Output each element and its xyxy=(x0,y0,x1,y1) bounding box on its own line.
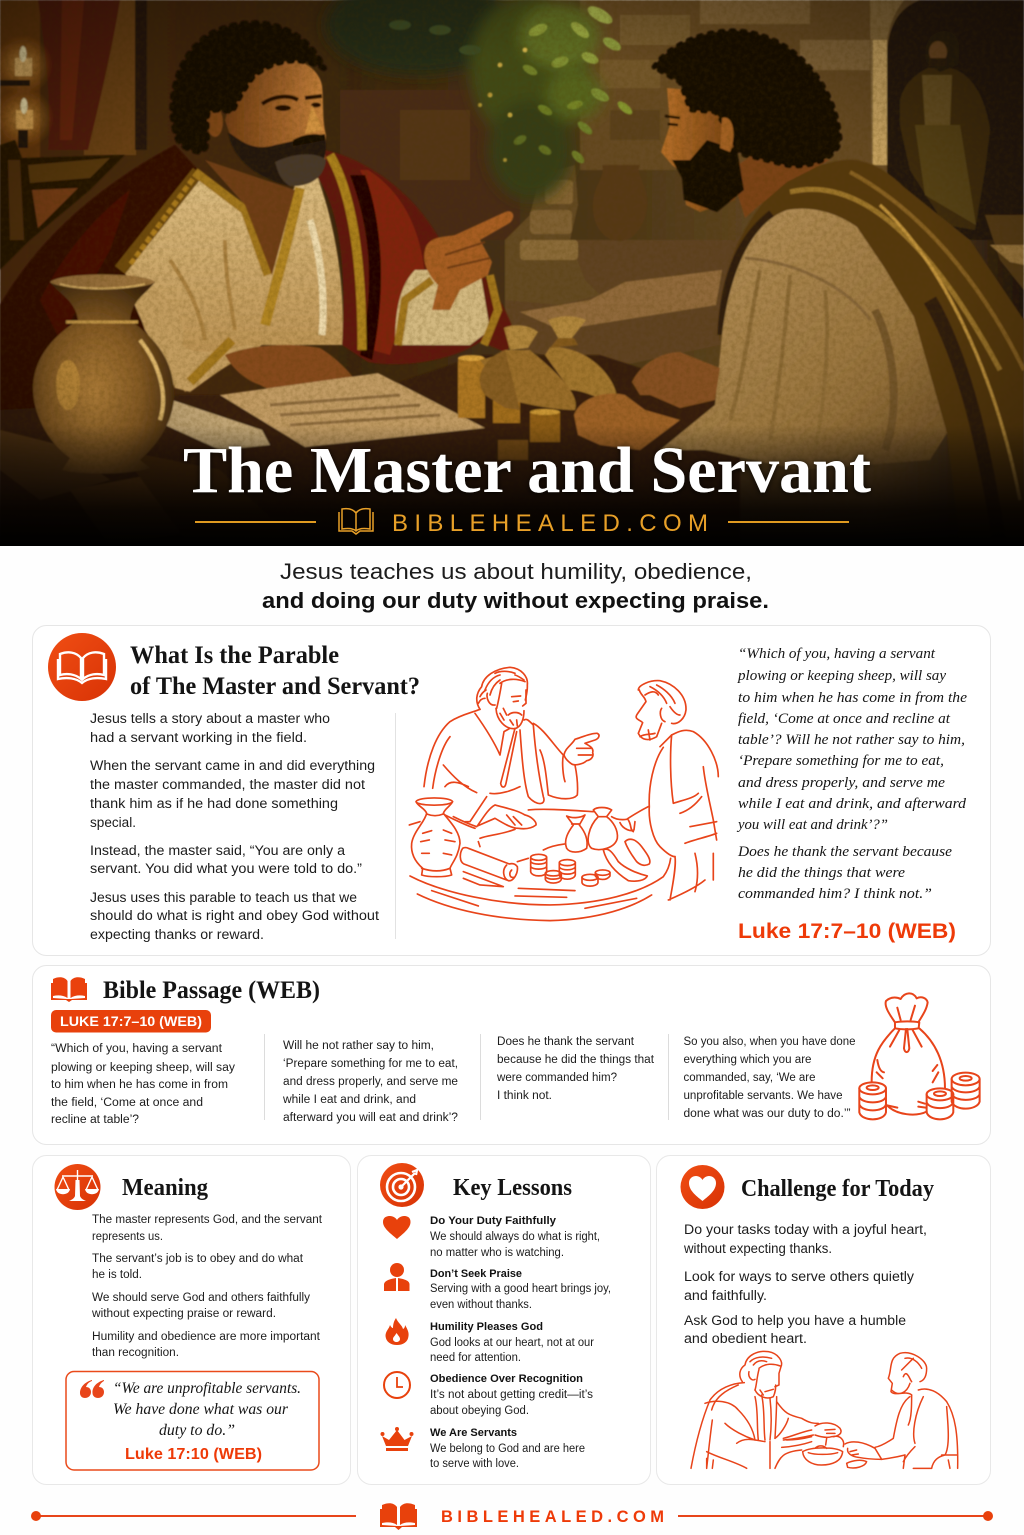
passage column 4: done what was our duty to do.’” xyxy=(684,1108,851,1120)
heading: Challenge for Today xyxy=(741,1176,934,1202)
metal jar xyxy=(33,274,174,474)
master: pointing hand xyxy=(395,270,490,345)
panel: challenge for today xyxy=(656,1156,990,1484)
scripture quote xyxy=(736,646,967,902)
passage column 2 xyxy=(282,1040,458,1124)
callout: key verse: We have done what was our xyxy=(113,1401,289,1418)
table xyxy=(0,355,740,546)
challenge text: Look for ways to serve others quietly xyxy=(684,1269,914,1284)
lesson: humility pleases god: Humility Pleases God xyxy=(430,1321,543,1333)
icon: scales xyxy=(54,1164,100,1210)
passage column 3: Does he thank the servant xyxy=(497,1036,635,1048)
icon: footer book xyxy=(380,1503,417,1530)
lesson: obedience over recognition xyxy=(384,1372,593,1417)
passage column 1: plowing or keeping sheep, will say xyxy=(51,1062,235,1074)
subtitle xyxy=(262,559,769,613)
meaning text: than recognition. xyxy=(92,1347,179,1359)
scripture quote: and dress properly, and serve me xyxy=(738,775,945,791)
meaning text: Humility and obedience are more important xyxy=(92,1331,321,1343)
icon: money bag and coins xyxy=(859,993,980,1119)
lesson: we are servants: We belong to God and are here xyxy=(430,1443,585,1455)
passage column 4: unprofitable servants. We have xyxy=(684,1090,842,1102)
lesson: obedience over recognition: Obedience Over Recognition xyxy=(430,1373,583,1385)
story text xyxy=(90,711,379,942)
stone pot xyxy=(594,165,639,239)
subtitle: and doing our duty without expecting praise. xyxy=(262,588,769,613)
story text: special. xyxy=(90,815,136,830)
icon: heart xyxy=(680,1165,724,1209)
servant: hands xyxy=(632,352,720,408)
story text: expecting thanks or reward. xyxy=(90,927,264,942)
lesson: humility pleases god: need for attention. xyxy=(430,1352,521,1364)
hero website brand xyxy=(195,509,849,537)
challenge text: and obedient heart. xyxy=(684,1331,807,1346)
hero banner: master and servant at the table xyxy=(0,0,1024,546)
icon: quote mark xyxy=(80,1380,104,1398)
meaning text: without expecting praise or reward. xyxy=(91,1308,276,1320)
passage column 1: recline at table’? xyxy=(51,1114,139,1126)
meaning text: We should serve God and others faithfully xyxy=(92,1292,310,1304)
callout: key verse xyxy=(66,1372,319,1470)
passage column 4 xyxy=(684,1036,856,1120)
master: cream tunic xyxy=(125,170,343,392)
passage column 2: Will he not rather say to him, xyxy=(283,1040,434,1052)
panel: what is the parable xyxy=(32,626,990,956)
lesson: do your duty faithfully: Do Your Duty Faithfully xyxy=(430,1215,557,1227)
challenge text: and faithfully. xyxy=(684,1288,767,1303)
master: red robe xyxy=(0,145,198,410)
story text: should do what is right and obey God without xyxy=(90,908,379,923)
meaning text: The master represents God, and the servant xyxy=(92,1214,323,1226)
passage column 3: I think not. xyxy=(497,1090,552,1102)
panel: key lessons xyxy=(358,1156,650,1484)
scripture quote: plowing or keeping sheep, will say xyxy=(737,668,946,684)
courtyard ground xyxy=(504,240,706,364)
lesson: we are servants: to serve with love. xyxy=(430,1458,519,1470)
subtitle: Jesus teaches us about humility, obedience, xyxy=(280,559,752,584)
servant: shawl xyxy=(720,159,1024,494)
passage column 2: and dress properly, and serve me xyxy=(283,1076,458,1088)
meaning text: he is told. xyxy=(92,1269,142,1281)
story text: Jesus tells a story about a master who xyxy=(90,711,330,726)
reference badge: LUKE 17:7–10 (WEB) xyxy=(60,1013,202,1029)
passage column 4: So you also, when you have done xyxy=(684,1036,856,1048)
passage column 1 xyxy=(51,1043,235,1126)
scripture quote: while I eat and drink, and afterward xyxy=(738,796,967,812)
story text: thank him as if he had done something xyxy=(90,796,338,811)
story text: the master commanded, the master did not xyxy=(90,777,365,792)
footer brand xyxy=(31,1503,993,1530)
painted texture xyxy=(0,0,1024,458)
callout: key verse: Luke 17:10 (WEB) xyxy=(125,1446,262,1463)
challenge text xyxy=(683,1222,927,1346)
parchment and scroll xyxy=(220,373,485,447)
callout: key verse: “We are unprofitable servants. xyxy=(113,1380,301,1397)
heading: of The Master and Servant? xyxy=(130,673,420,700)
heading: Bible Passage (WEB) xyxy=(103,977,320,1004)
story text: When the servant came in and did everything xyxy=(90,758,375,773)
scripture quote: he did the things that were xyxy=(738,865,905,881)
callout: key verse: duty to do.” xyxy=(159,1422,235,1439)
heading: Meaning xyxy=(122,1175,208,1201)
challenge text: without expecting thanks. xyxy=(683,1241,832,1256)
meaning text xyxy=(91,1214,323,1359)
heading xyxy=(130,642,420,700)
passage column 3: were commanded him? xyxy=(496,1072,617,1084)
story text: servant. You did what you were told to do.” xyxy=(90,861,362,876)
scripture quote: “Which of you, having a servant xyxy=(738,646,936,662)
passage column 4: everything which you are xyxy=(684,1054,812,1066)
illustration: master and servant at the table xyxy=(409,667,718,921)
passage column 2: ‘Prepare something for me to eat, xyxy=(283,1058,458,1070)
master: face, beard and hair xyxy=(225,58,326,175)
dark fade behind title xyxy=(0,425,1024,546)
passage column 4: commanded, say, ‘We are xyxy=(684,1072,816,1084)
scripture quote: to him when he has come in from the xyxy=(738,690,967,706)
story text: Jesus uses this parable to teach us that we xyxy=(90,890,357,905)
challenge text: Do your tasks today with a joyful heart, xyxy=(684,1222,927,1237)
lesson: do your duty faithfully: no matter who is watching. xyxy=(430,1247,564,1259)
icon: target xyxy=(380,1163,424,1207)
story text: had a servant working in the field. xyxy=(90,730,307,745)
scripture reference: Luke 17:7–10 (WEB) xyxy=(738,920,956,943)
story text: Instead, the master said, “You are only a xyxy=(90,843,346,858)
passage column 3: because he did the things that xyxy=(497,1054,655,1066)
passage column 2: afterward you will eat and drink’? xyxy=(283,1112,458,1124)
challenge text: Ask God to help you have a humble xyxy=(684,1313,906,1328)
lesson: obedience over recognition: It’s not about getting credit—it’s xyxy=(430,1389,593,1401)
illustration: sharing at the basin xyxy=(691,1351,958,1468)
passage column 3 xyxy=(496,1036,655,1102)
lesson: don't seek praise: even without thanks. xyxy=(430,1299,532,1311)
lesson: humility pleases god xyxy=(386,1318,594,1364)
lesson: don't seek praise xyxy=(384,1263,611,1311)
coin stacks xyxy=(458,358,485,418)
lesson: we are servants xyxy=(380,1427,585,1470)
scripture quote: ‘Prepare something for me to eat, xyxy=(738,753,944,769)
carved chair xyxy=(0,140,125,270)
master: neck and chest xyxy=(205,160,295,275)
scripture quote: Does he thank the servant because xyxy=(737,844,952,860)
scripture quote: you will eat and drink’?” xyxy=(736,817,888,833)
scripture quote: table’? Will he not rather say to him, xyxy=(738,732,965,748)
foliage xyxy=(325,0,634,200)
servant: neck, face, beard and hair xyxy=(737,156,830,218)
icon: open book xyxy=(48,633,116,701)
lesson: do your duty faithfully xyxy=(383,1215,600,1259)
scripture quote: commanded him? I think not.” xyxy=(738,886,932,902)
panel: bible passage xyxy=(32,966,990,1144)
lesson: humility pleases god: God looks at our heart, not at our xyxy=(430,1337,594,1349)
footer brand: BIBLEHEALED.COM xyxy=(441,1508,664,1526)
reference badge xyxy=(51,1010,211,1032)
meaning text: The servant’s job is to obey and do what xyxy=(92,1253,304,1265)
passage column 1: the field, ‘Come at once and xyxy=(51,1097,203,1109)
master: hand on table xyxy=(224,344,352,389)
hero website brand: BIBLEHEALED.COM xyxy=(392,510,708,537)
lesson: don't seek praise: Don’t Seek Praise xyxy=(430,1268,522,1280)
lesson: do your duty faithfully: We should always do what is right, xyxy=(430,1231,600,1243)
background figure xyxy=(900,68,990,230)
scripture quote: field, ‘Come at once and recline at xyxy=(738,711,951,727)
heading: What Is the Parable xyxy=(130,642,339,669)
icon: book xyxy=(51,977,87,1002)
passage column 2: while I eat and drink, and xyxy=(282,1094,416,1106)
passage column 1: “Which of you, having a servant xyxy=(51,1043,223,1055)
panel: meaning xyxy=(32,1156,350,1484)
lesson: don't seek praise: Serving with a good heart brings joy, xyxy=(430,1283,611,1295)
meaning text: represents us. xyxy=(92,1231,163,1243)
edge vignette xyxy=(0,0,1024,546)
money bags xyxy=(545,347,617,402)
lesson: obedience over recognition: about obeying God. xyxy=(430,1405,529,1417)
passage column 1: to him when he has come in from xyxy=(51,1079,228,1091)
heading: Key Lessons xyxy=(453,1175,572,1201)
title: The Master and Servant xyxy=(183,434,871,507)
lesson: we are servants: We Are Servants xyxy=(430,1427,517,1439)
stone pillar xyxy=(506,166,578,241)
servant: tunic xyxy=(660,209,947,470)
